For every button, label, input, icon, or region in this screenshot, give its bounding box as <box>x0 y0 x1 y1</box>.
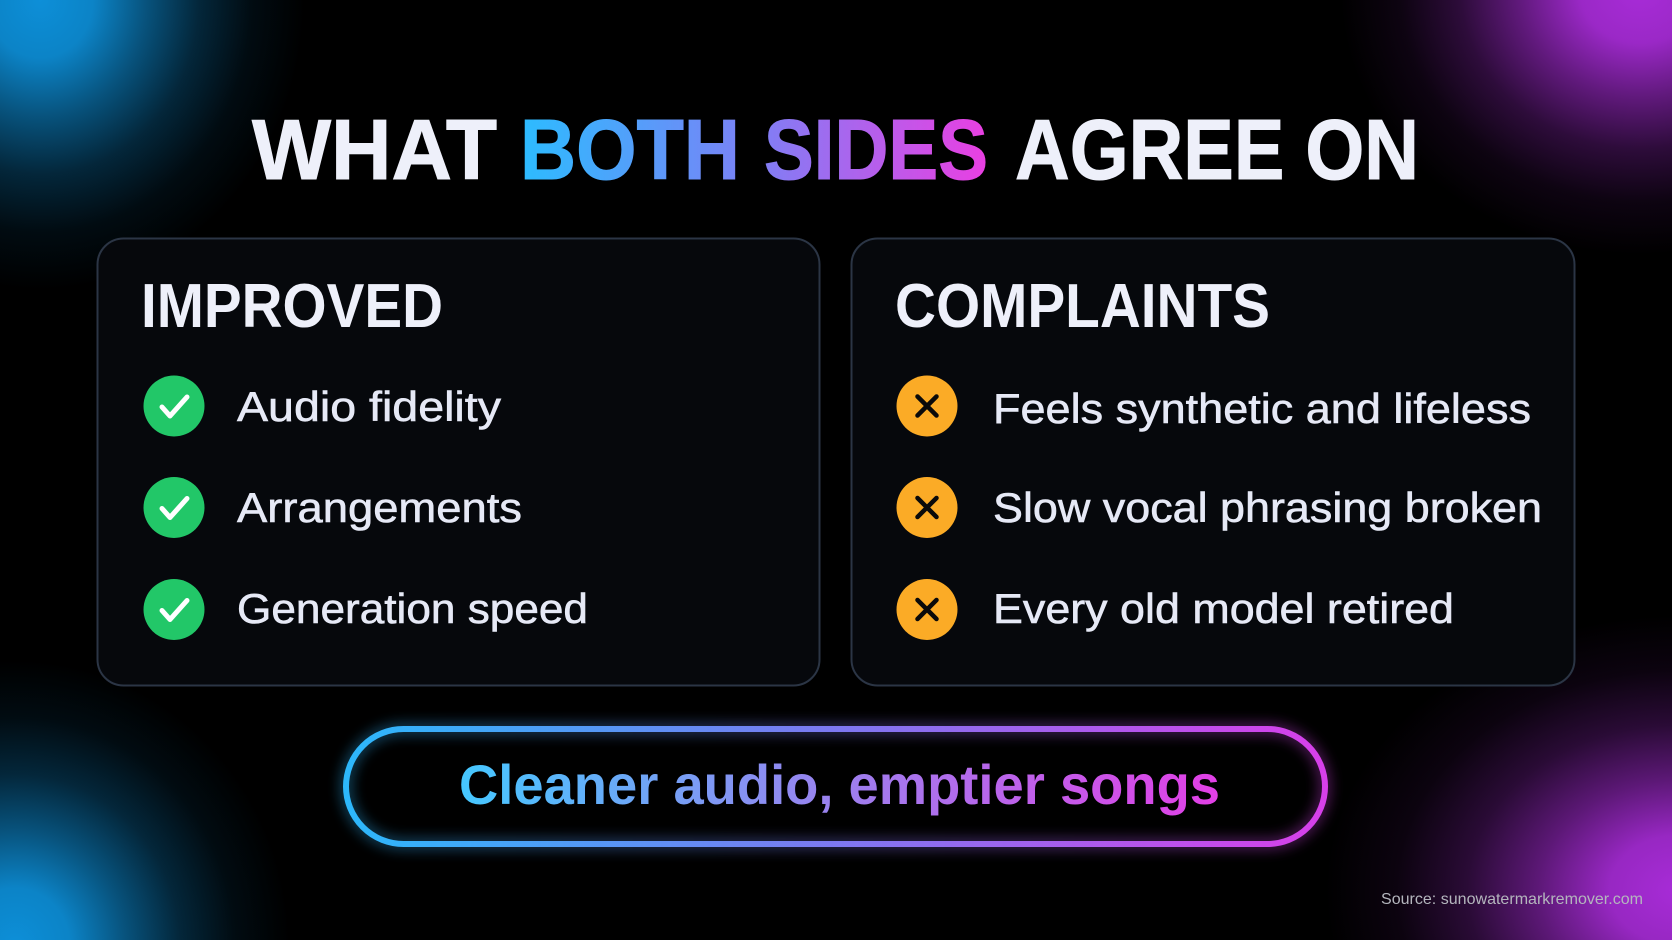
item: slow vocal phrasing: Slow vocal phrasing broken <box>993 484 1542 531</box>
item: feels synthetic: Feels synthetic and lifeless <box>993 385 1531 432</box>
title <box>252 103 1419 198</box>
panel: improved <box>98 238 820 686</box>
title: AGREE ON <box>1015 103 1419 198</box>
item: generation speed: Generation speed <box>237 585 588 632</box>
item: arrangements: Arrangements <box>237 484 522 531</box>
panel: complaints <box>852 238 1574 686</box>
item: generation speed <box>144 579 588 640</box>
callout: takeaway pill: Cleaner audio, emptier songs <box>459 753 1220 816</box>
item: audio fidelity: Audio fidelity <box>237 383 501 430</box>
title: SIDES <box>764 103 988 198</box>
item: audio fidelity <box>144 376 501 436</box>
item: every old model: Every old model retired <box>993 585 1454 632</box>
item: arrangements <box>144 477 522 538</box>
heading: complaints: COMPLAINTS <box>895 272 1270 341</box>
title: BOTH <box>520 103 740 198</box>
title: WHAT <box>252 103 497 198</box>
item: slow vocal phrasing <box>896 477 1542 538</box>
heading: improved: IMPROVED <box>141 272 443 341</box>
callout: takeaway pill <box>346 729 1325 844</box>
item: every old model <box>896 579 1454 640</box>
item: feels synthetic <box>896 376 1531 436</box>
source note: Source: sunowatermarkremover.com <box>1381 891 1643 908</box>
